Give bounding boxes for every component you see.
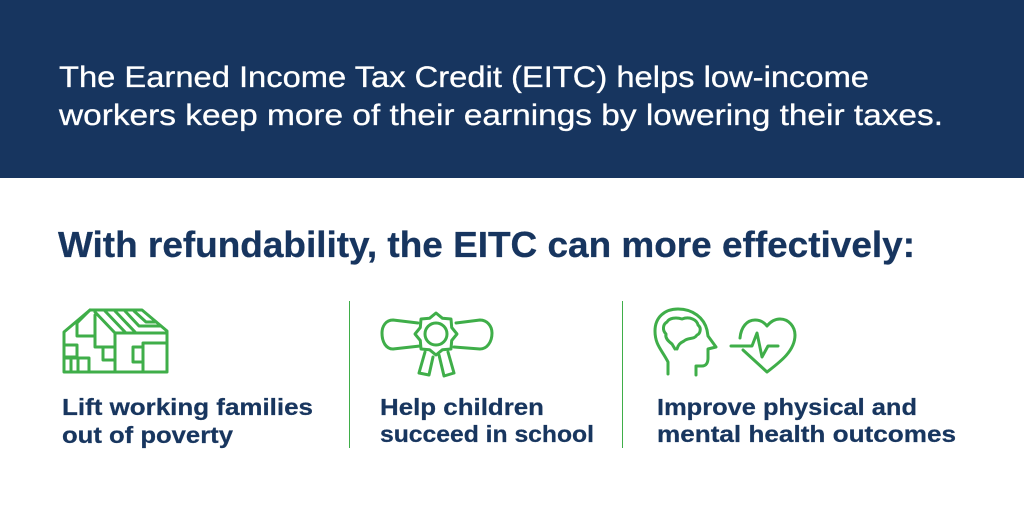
header band: workers keep more of their earnings by lowering their taxes. — [58, 99, 943, 132]
header band: The Earned Income Tax Credit (EITC) helps low-income — [59, 61, 869, 94]
label: improve health: mental health outcomes — [657, 421, 956, 447]
heading: With refundability, the EITC can more effectively: — [58, 224, 915, 265]
icon: heart with pulse — [731, 319, 795, 372]
label: improve health — [657, 394, 956, 447]
label: help children: succeed in school — [380, 421, 594, 447]
label: lift working families: out of poverty — [62, 422, 233, 448]
icon: head with brain — [655, 309, 716, 375]
label: lift working families: Lift working families — [62, 394, 313, 420]
icon: house — [64, 310, 167, 372]
label: help children: Help children — [380, 394, 544, 420]
label: lift working families — [62, 394, 313, 448]
icon: diploma with ribbon — [382, 313, 492, 376]
header band — [0, 0, 1024, 178]
label: help children — [380, 394, 594, 447]
label: improve health: Improve physical and — [657, 394, 917, 420]
